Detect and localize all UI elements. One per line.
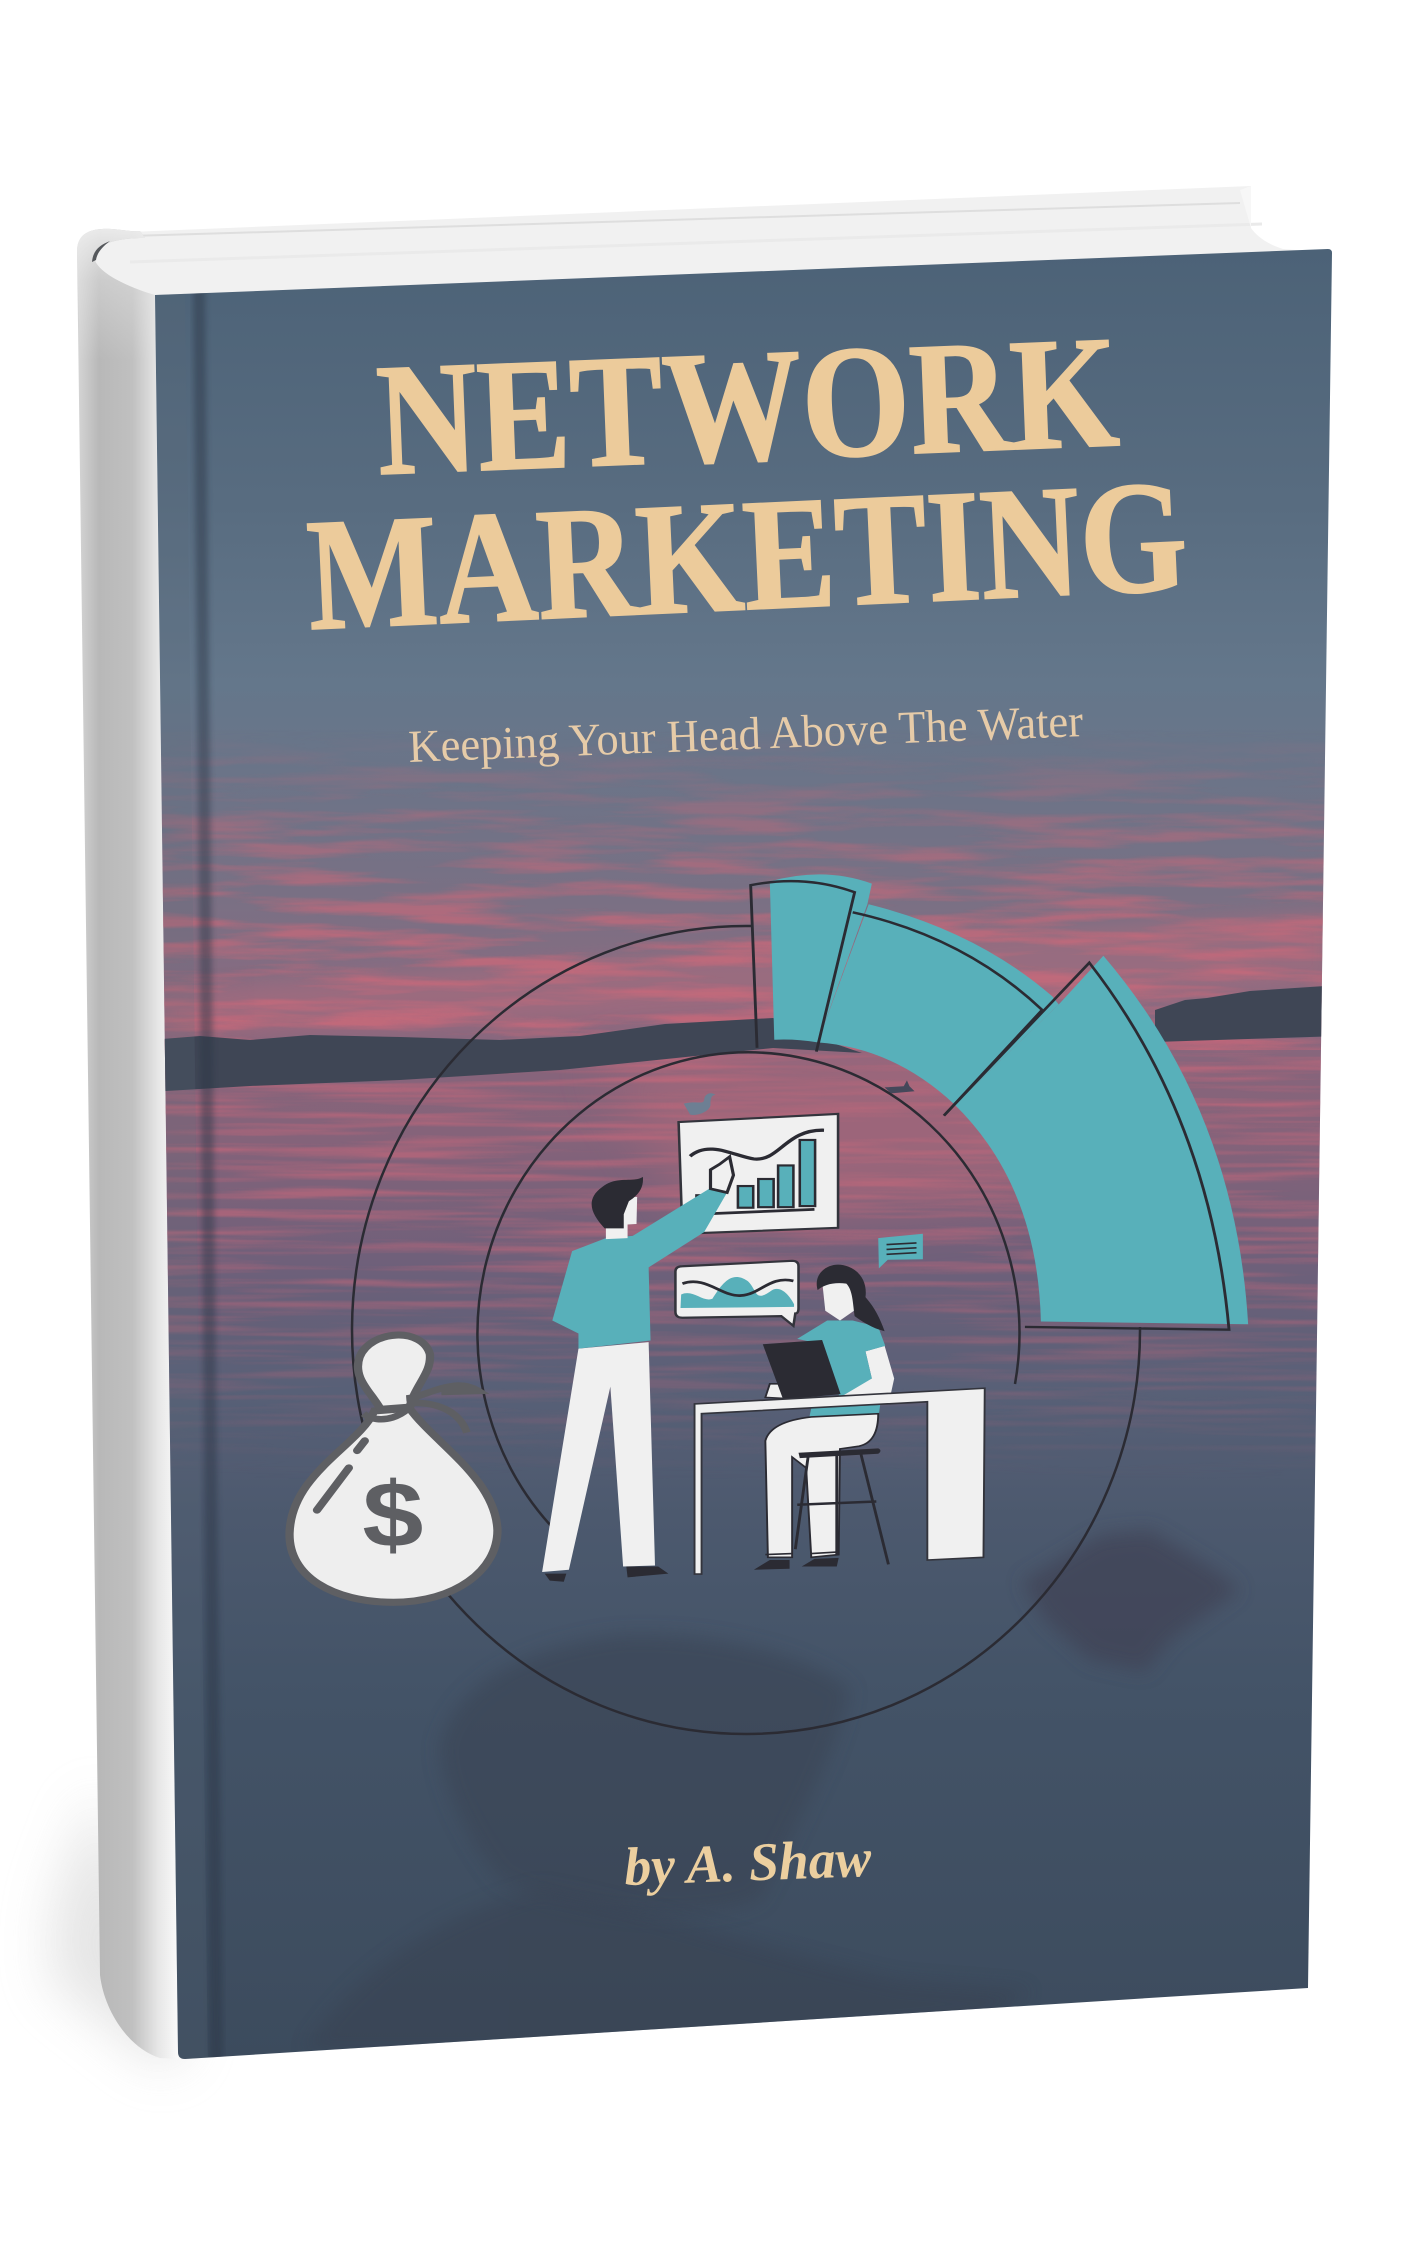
cover artwork	[140, 240, 1350, 2070]
gutter crease	[193, 280, 223, 2070]
woman at desk	[754, 1265, 894, 1570]
donut chart teal sectors	[770, 874, 1248, 1324]
shadow under book	[50, 1790, 190, 2070]
large rock	[440, 1634, 850, 1914]
chart speech bubble	[675, 1261, 799, 1326]
man presenting	[542, 1157, 733, 1582]
outer ring	[352, 926, 1140, 1734]
spine inner shadow	[92, 241, 110, 262]
title: MARKETING	[304, 446, 1191, 664]
background photo gradient	[140, 240, 1350, 2070]
presentation board	[679, 1114, 838, 1234]
illustration	[290, 874, 1248, 1602]
donut chart outlines	[751, 881, 1229, 1330]
money bag	[290, 1335, 497, 1602]
dollar sign: $	[362, 1462, 423, 1567]
spine highlight at top	[77, 229, 157, 360]
distant treeline	[150, 985, 1340, 1092]
title	[304, 302, 1191, 664]
book mockup	[40, 186, 1332, 2064]
water glow	[614, 1050, 1020, 1240]
rock right	[1022, 1530, 1240, 1672]
inner ring	[477, 1052, 1019, 1527]
page block	[93, 186, 1320, 300]
horizon glow	[160, 910, 1330, 1038]
message icon	[878, 1234, 923, 1268]
lower rock	[320, 1904, 1012, 2050]
spine	[77, 229, 178, 2059]
swans	[684, 1080, 915, 1115]
author: by A. Shaw	[623, 1828, 873, 1897]
pink cloud streaks	[162, 752, 1324, 1050]
spine-side sheen	[162, 814, 198, 1341]
desk	[695, 1388, 985, 1574]
subtitle: Keeping Your Head Above The Water	[407, 695, 1084, 772]
title: NETWORK	[373, 302, 1122, 509]
pink water ripples	[164, 1040, 1321, 1448]
